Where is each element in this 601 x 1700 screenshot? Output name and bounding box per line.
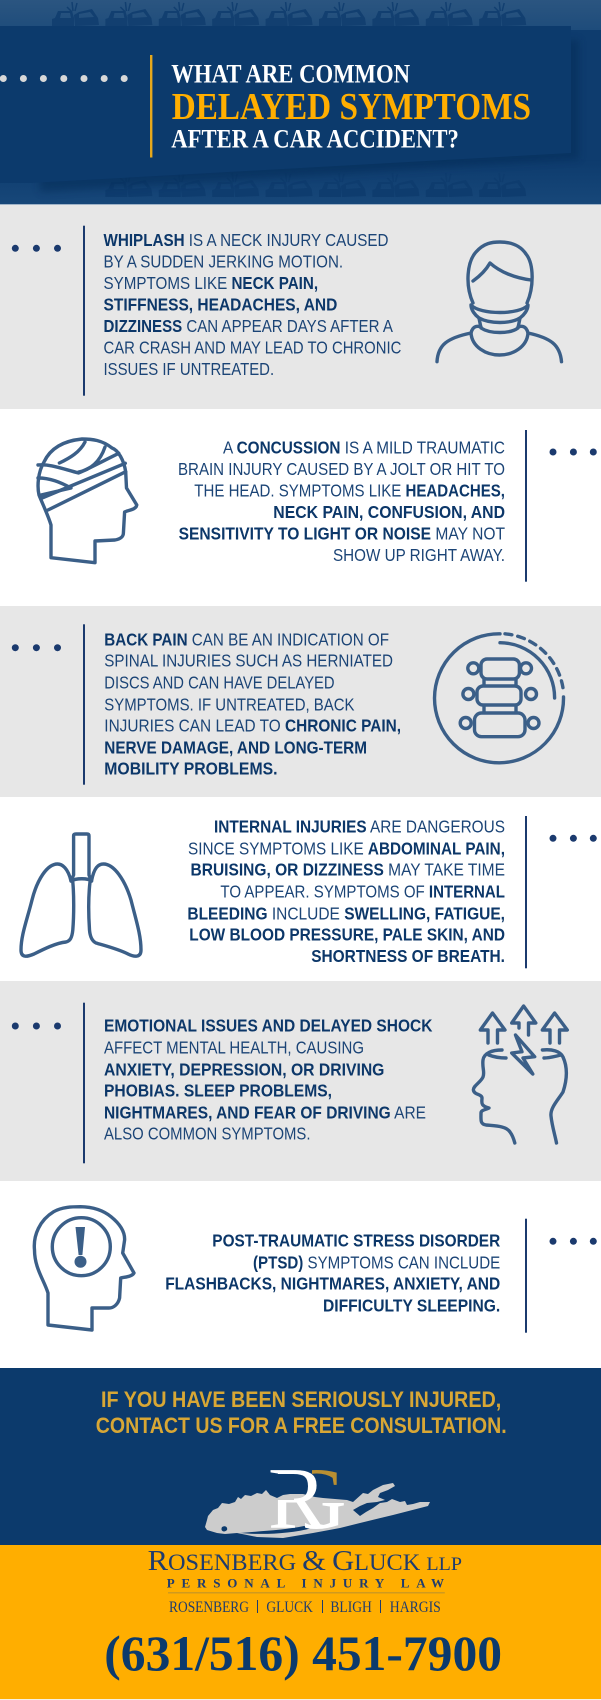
text: internal injuries [187,816,505,966]
divider line [525,816,527,968]
text: concussion: A CONCUSSION IS A MILD TRAUMATIC [223,437,505,457]
text: back pain: SYMPTOMS. IF UNTREATED, BACK [104,694,355,714]
divider line [83,1003,85,1163]
dots [550,1238,597,1245]
title: WHAT ARE COMMON [171,60,410,89]
text: whiplash: ISSUES IF UNTREATED. [104,359,274,379]
text: back pain: INJURIES CAN LEAD TO CHRONIC PAIN, [104,715,401,735]
text: PTSD: (PTSD) SYMPTOMS CAN INCLUDE [253,1252,500,1272]
text: internal injuries: SHORTNESS OF BREATH. [311,946,505,966]
divider line [525,430,527,582]
icon: head with exclamation [34,1207,134,1330]
icon: bandaged head [38,439,137,563]
title panel [0,26,571,183]
text: concussion [178,437,505,565]
text: PTSD: POST-TRAUMATIC STRESS DISORDER [212,1230,501,1250]
text: emotional issues: ANXIETY, DEPRESSION, OR DRIVING [104,1059,384,1079]
dots [12,644,61,651]
text: PTSD [165,1230,501,1315]
phone number: (631/516) 451-7900 [104,1625,502,1681]
partner names [169,1599,441,1616]
dots [550,448,597,456]
icon: neck brace [437,242,562,362]
text: back pain: NERVE DAMAGE, AND LONG-TERM [104,737,367,757]
panel: call to action [0,1368,601,1548]
text: emotional issues: PHOBIAS. SLEEP PROBLEMS, [104,1080,332,1100]
title [171,60,531,154]
text: PTSD: DIFFICULTY SLEEPING. [323,1295,500,1315]
text: back pain: BACK PAIN CAN BE AN INDICATION OF [104,629,389,649]
dotted line [0,75,128,82]
car crash pattern [52,2,526,26]
text: whiplash: WHIPLASH IS A NECK INJURY CAUSED [104,230,388,250]
text: emotional issues: EMOTIONAL ISSUES AND DELAYED SHOCK [104,1015,433,1035]
firm name: ROSENBERG & GLUCK LLP [148,1545,462,1577]
icon: lungs [21,834,141,956]
text: internal injuries: INTERNAL INJURIES ARE DANGEROUS [214,816,505,836]
text: internal injuries: TO APPEAR. SYMPTOMS OF INTERNAL [220,881,505,901]
partner names: ROSENBERG [169,1599,249,1616]
panel: back pain [0,606,601,797]
text: whiplash: STIFFNESS, HEADACHES, AND [104,294,337,314]
panel: internal injuries [0,797,601,981]
dots [550,835,597,842]
text: concussion: BRAIN INJURY CAUSED BY A JOLT OR HIT TO [178,459,505,479]
CTA text: IF YOU HAVE BEEN SERIOUSLY INJURED, [101,1387,501,1412]
icon: spine [435,634,564,763]
divider line [83,226,85,396]
partner names: BLIGH [330,1599,372,1616]
panel: whiplash [0,205,601,409]
dots [12,245,61,252]
partner names: HARGIS [390,1599,441,1616]
logo: Long Island with RG: G [283,1451,347,1548]
text: emotional issues: AFFECT MENTAL HEALTH, CAUSING [104,1037,364,1057]
panel: concussion [0,409,601,606]
logo: Long Island with RG [205,1470,430,1538]
divider line [83,624,85,785]
text: back pain: DISCS AND CAN HAVE DELAYED [104,672,335,692]
CTA text: CONTACT US FOR A FREE CONSULTATION. [96,1413,507,1438]
header banner [0,0,601,205]
title: DELAYED SYMPTOMS [172,86,531,128]
text: back pain [104,629,401,778]
text: whiplash: BY A SUDDEN JERKING MOTION. [104,251,343,271]
text: concussion: SHOW UP RIGHT AWAY. [333,545,505,565]
text: whiplash [104,230,401,379]
dots [12,1022,61,1030]
text: back pain: SPINAL INJURIES SUCH AS HERNIATED [104,650,393,670]
panel: PTSD [0,1181,601,1368]
text: whiplash: SYMPTOMS LIKE NECK PAIN, [104,273,318,293]
text: concussion: SENSITIVITY TO LIGHT OR NOISE MAY NOT [179,523,505,543]
panel: firm and phone [0,1545,601,1700]
partner names: GLUCK [266,1599,313,1616]
gold divider [150,55,152,158]
text: internal injuries: SINCE SYMPTOMS LIKE ABDOMINAL PAIN, [188,838,505,858]
text: PTSD: FLASHBACKS, NIGHTMARES, ANXIETY, AND [165,1273,500,1293]
subtitle: PERSONAL INJURY LAW [167,1576,444,1591]
logo: Long Island with RG: G [283,1451,347,1548]
logo: Long Island with RG: R [268,1451,327,1548]
gold rule [168,1592,445,1594]
title: AFTER A CAR ACCIDENT? [171,125,459,154]
text: whiplash: DIZZINESS CAN APPEAR DAYS AFTER A [104,316,393,336]
text: internal injuries: LOW BLOOD PRESSURE, PALE SKIN, AND [189,924,505,944]
text: whiplash: CAR CRASH AND MAY LEAD TO CHRONIC [104,338,401,358]
icon: head with arrows and lightning [473,1006,567,1143]
text: back pain: MOBILITY PROBLEMS. [104,758,278,778]
lower car pattern [105,173,526,197]
text: internal injuries: BLEEDING INCLUDE SWELLING, FATIGUE, [187,903,505,923]
text: emotional issues [104,1015,433,1143]
CTA text [96,1387,507,1438]
text: emotional issues: ALSO COMMON SYMPTOMS. [104,1123,310,1143]
text: concussion: THE HEAD. SYMPTOMS LIKE HEADACHES, [194,480,505,500]
text: internal injuries: BRUISING, OR DIZZINESS MAY TAKE TIME [190,859,505,879]
divider line [525,1219,527,1333]
text: concussion: NECK PAIN, CONFUSION, AND [273,502,505,522]
panel: emotional issues [0,981,601,1181]
text: emotional issues: NIGHTMARES, AND FEAR OF DRIVING ARE [104,1102,426,1122]
